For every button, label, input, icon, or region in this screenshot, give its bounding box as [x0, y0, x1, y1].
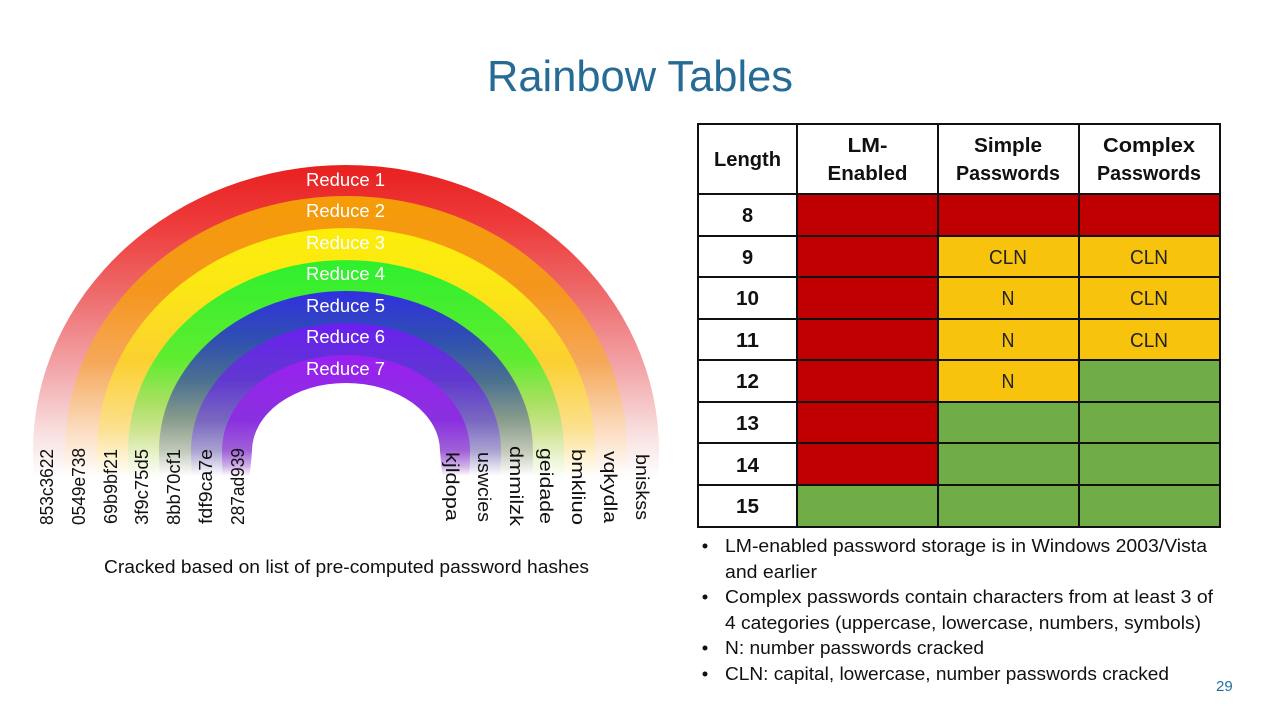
reduced password labels: vqkydla	[600, 451, 620, 524]
reduced password labels: uswcies	[474, 452, 494, 522]
table header: Passwords	[956, 163, 1060, 185]
table row lengths: 8	[742, 205, 753, 227]
password cracking table	[698, 123, 1220, 528]
hash labels	[37, 448, 248, 525]
hash labels: 8bb70cf1	[164, 449, 184, 525]
table header: Passwords	[1097, 163, 1201, 185]
band: Reduce 3 yellow	[97, 228, 595, 480]
reduce labels: Reduce 4	[306, 264, 385, 284]
hash labels: fdf9ca7e	[196, 449, 216, 524]
reduce labels: Reduce 5	[306, 296, 385, 316]
table cell fills	[698, 124, 1220, 527]
reduced password labels: geidade	[536, 448, 556, 524]
hash labels: 69b9bf21	[101, 449, 121, 524]
table header	[714, 135, 1201, 185]
note: LM-enabled storage: and earlier	[725, 561, 817, 582]
reduced password labels: dmmilzk	[506, 446, 526, 527]
hash labels: 287ad939	[228, 448, 248, 525]
table header: LM-	[848, 135, 888, 157]
rainbow inner opening	[249, 383, 443, 480]
table cell values: N	[1002, 371, 1014, 393]
table row lengths: 10	[736, 288, 759, 310]
note: LM-enabled storage	[702, 535, 1208, 582]
hash labels: 853c3622	[37, 449, 57, 525]
band: Reduce 5 blue	[159, 291, 533, 480]
table cell values	[989, 247, 1168, 393]
table grid	[698, 123, 1220, 528]
reduce labels: Reduce 2	[306, 201, 385, 221]
note: N meaning: N: number passwords cracked	[725, 637, 984, 658]
table cell values: CLN	[1130, 288, 1168, 310]
reduce labels: Reduce 3	[306, 233, 385, 253]
reduced password labels: kjldopa	[442, 452, 462, 522]
page number: 29	[1216, 678, 1233, 695]
reduced password labels: bmkliuo	[568, 449, 588, 525]
table row lengths: 11	[736, 330, 759, 352]
table cell values: N	[1002, 330, 1014, 352]
reduce labels: Reduce 7	[306, 359, 385, 379]
rainbow diagram	[33, 165, 659, 480]
note: CLN meaning: CLN: capital, lowercase, number passwords cracked	[725, 663, 1169, 684]
table header: Enabled	[828, 163, 908, 185]
table row lengths: 14	[736, 455, 760, 477]
table cell values: CLN	[989, 247, 1027, 269]
bullet notes	[702, 535, 1214, 684]
table header: Length	[714, 149, 781, 171]
reduce labels: Reduce 6	[306, 327, 385, 347]
note: complex passwords	[702, 586, 1214, 633]
note: complex passwords: Complex passwords contain characters from at least 3 of	[725, 586, 1214, 607]
rainbow caption: Cracked based on list of pre-computed password hashes	[104, 556, 589, 577]
table row lengths: 12	[736, 371, 759, 393]
band: Reduce 7 violet	[222, 355, 470, 480]
title: Rainbow Tables	[487, 52, 793, 101]
reduced password labels: bniskss	[632, 454, 652, 520]
table cell values: CLN	[1130, 247, 1168, 269]
band: Reduce 1 red	[33, 165, 659, 480]
band: Reduce 2 orange	[65, 196, 627, 480]
table cell values: N	[1002, 288, 1014, 310]
note: LM-enabled storage: LM-enabled password storage is in Windows 2003/Vista	[725, 535, 1208, 556]
band: Reduce 6 indigo	[191, 323, 501, 480]
table row lengths: 15	[736, 496, 759, 518]
table row lengths: 13	[736, 413, 759, 435]
table header: Complex	[1103, 135, 1195, 157]
table cell values: CLN	[1130, 330, 1168, 352]
table header: Simple	[974, 135, 1042, 157]
note: complex passwords: 4 categories (uppercase, lowercase, numbers, symbols)	[725, 612, 1201, 633]
band: Reduce 4 green	[128, 260, 564, 480]
reduce labels: Reduce 1	[306, 170, 385, 190]
hash labels: 3f9c75d5	[132, 449, 152, 525]
reduce labels	[306, 170, 385, 379]
reduced password labels	[442, 446, 652, 527]
hash labels: 0549e738	[69, 448, 89, 525]
table row lengths: 9	[742, 247, 753, 269]
table row lengths	[736, 205, 760, 518]
